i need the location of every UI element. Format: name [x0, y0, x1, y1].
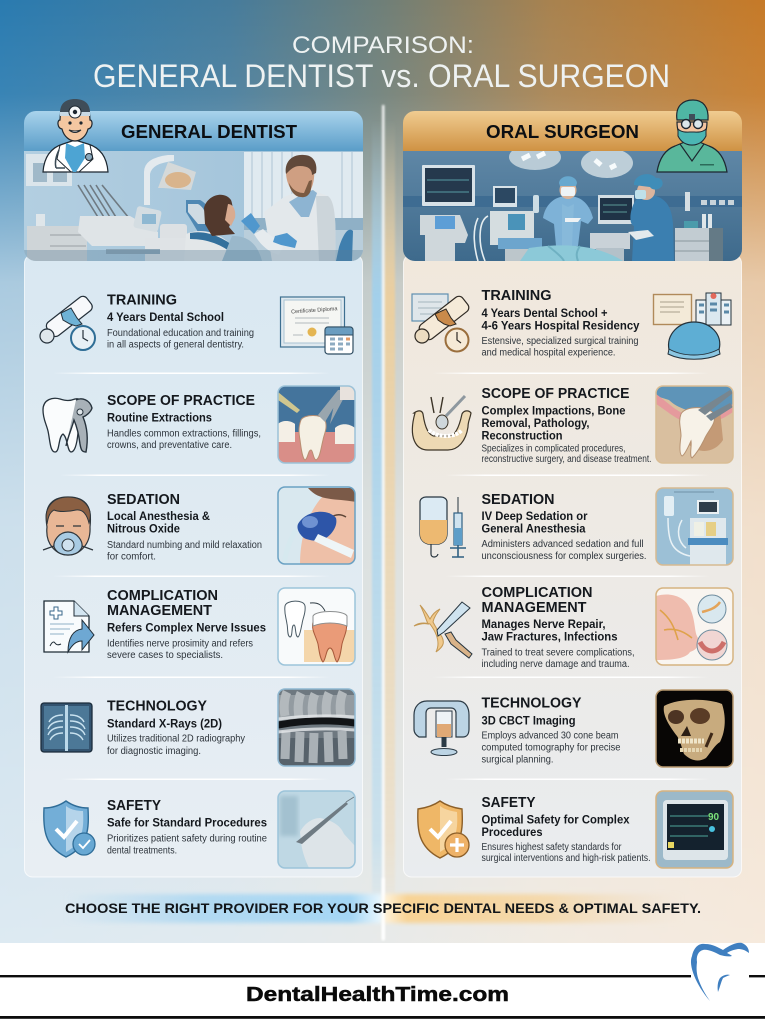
icon: diploma and clock	[40, 294, 95, 350]
picture: tooth extraction	[278, 386, 355, 463]
divider	[53, 372, 330, 374]
text	[107, 393, 261, 451]
text: Trained to treat severe complications,	[482, 647, 634, 658]
panel body	[24, 255, 362, 877]
text: unconsciousness for complex surgeries.	[482, 551, 646, 562]
text: surgical planning.	[482, 755, 554, 766]
rows: oral surgeon	[412, 288, 733, 868]
picture: tooth root diagram	[278, 588, 356, 665]
text: SCOPE OF PRACTICE	[107, 393, 255, 409]
text: in all aspects of general dentistry.	[107, 340, 244, 351]
text: TRAINING	[107, 292, 177, 308]
divider	[53, 676, 330, 678]
icon: gold shield plus	[418, 801, 469, 858]
rows: general dentist	[40, 292, 356, 868]
text: Removal, Pathology,	[482, 416, 590, 430]
callout: call to action: CHOOSE THE RIGHT PROVIDER FOR YOUR SPECIFIC DENTAL NEEDS & OPTIMAL SAFETY.	[65, 900, 701, 916]
text	[107, 292, 254, 351]
text: Manages Nerve Repair,	[482, 617, 606, 631]
text: for diagnostic imaging.	[107, 746, 201, 757]
text: TECHNOLOGY	[107, 699, 207, 715]
divider	[432, 372, 709, 374]
text: COMPLICATION	[482, 585, 592, 601]
title	[93, 32, 670, 94]
text	[482, 585, 634, 670]
text: SAFETY	[482, 795, 536, 811]
text: Refers Complex Nerve Issues	[107, 621, 266, 635]
text: surgical interventions and high-risk patients.	[482, 853, 650, 864]
picture: anesthesia machine	[656, 488, 733, 565]
divider	[53, 576, 330, 577]
text: computed tomography for precise	[482, 743, 621, 754]
text: Complex Impactions, Bone	[482, 403, 626, 417]
icon: nerve and scalpel	[414, 602, 472, 658]
text: dental treatments.	[107, 845, 177, 856]
text: SEDATION	[482, 492, 554, 508]
text: Specializes in complicated procedures,	[482, 444, 626, 455]
picture: certificate and calendar: Certificate Diploma	[291, 306, 339, 315]
text: crowns, and preventative care.	[107, 440, 232, 451]
header bar	[24, 111, 363, 151]
row: safety	[44, 791, 355, 868]
footer	[0, 943, 765, 1024]
picture: nitrous mask	[278, 487, 356, 564]
icon: tooth and forceps	[43, 398, 92, 452]
text: Procedures	[482, 825, 543, 839]
text: Employs advanced 30 cone beam	[482, 731, 618, 742]
text: 4-6 Years Hospital Residency	[482, 318, 640, 332]
text: Prioritizes patient safety during routine	[107, 834, 267, 845]
row: training	[412, 288, 731, 359]
text	[482, 795, 650, 864]
picture: certificate and calendar	[280, 297, 353, 354]
text: severe cases to specialists.	[107, 650, 223, 661]
title: COMPARISON:	[292, 32, 474, 59]
icon: chest x-ray	[41, 703, 92, 752]
text: Reconstruction	[482, 429, 562, 443]
text: MANAGEMENT	[107, 603, 212, 619]
text: Ensures highest safety standards for	[482, 842, 622, 853]
text: Standard numbing and mild relaxation	[107, 540, 262, 551]
text: including nerve damage and trauma.	[482, 659, 630, 670]
panel: general dentist	[24, 111, 363, 877]
text: Jaw Fractures, Infections	[482, 630, 618, 644]
picture: dental x-ray	[278, 689, 355, 766]
icon: patient with mask	[43, 497, 93, 555]
icon: CBCT scanner	[414, 701, 469, 756]
text: Administers advanced sedation and full	[482, 539, 644, 550]
icon: referral document	[44, 601, 94, 652]
heading: GENERAL DENTIST	[121, 122, 297, 142]
text: Routine Extractions	[107, 411, 212, 425]
icon: shield check	[44, 801, 95, 857]
picture: patient monitor	[656, 791, 733, 868]
text: MANAGEMENT	[482, 600, 587, 616]
operating room photo	[403, 144, 742, 261]
text: 3D CBCT Imaging	[482, 714, 576, 728]
text	[482, 696, 621, 766]
row: training	[40, 292, 353, 354]
picture: certificate, hospital, surgical cap	[654, 293, 731, 359]
text: Standard X-Rays (2D)	[107, 717, 222, 731]
text: General Anesthesia	[482, 522, 586, 536]
icon: tooth logo	[691, 943, 749, 1001]
text: Estensive, specialized surgical training	[482, 336, 638, 347]
text: Handles common extractions, fillings,	[107, 429, 261, 440]
text: Safe for Standard Procedures	[107, 816, 267, 830]
row: safety	[418, 791, 733, 868]
text: Nitrous Oxide	[107, 522, 180, 536]
text	[107, 699, 245, 757]
text: Utilizes traditional 2D radiography	[107, 734, 245, 745]
divider	[445, 576, 710, 577]
website name: DentalHealthTime.com	[246, 984, 509, 1006]
text: for comfort.	[107, 551, 156, 562]
row: technology	[41, 689, 355, 766]
text	[107, 492, 262, 562]
picture: facial anatomy	[656, 588, 733, 665]
avatar: surgeon	[657, 100, 727, 172]
text: SEDATION	[107, 492, 180, 508]
icon: IV bag and syringe	[420, 497, 466, 557]
text	[107, 588, 266, 661]
picture: patient monitor: 90	[708, 812, 720, 823]
divider	[445, 474, 710, 476]
picture: surgical extraction	[656, 386, 733, 463]
title: GENERAL DENTIST vs. ORAL SURGEON	[93, 58, 670, 94]
text: Local Anesthesia &	[107, 509, 210, 523]
text: 4 Years Dental School +	[482, 306, 608, 320]
text: IV Deep Sedation or	[482, 509, 588, 523]
text: Optimal Safety for Complex	[482, 813, 630, 827]
clinic photo	[24, 151, 363, 261]
heading: ORAL SURGEON	[486, 122, 639, 142]
text: and medical hospital experience.	[482, 348, 616, 359]
row: complication	[44, 588, 356, 665]
panel body	[404, 255, 742, 877]
text	[482, 492, 646, 562]
text	[482, 386, 652, 465]
text: reconstructive surgery, and disease treatment.	[482, 454, 652, 465]
text: SCOPE OF PRACTICE	[482, 386, 630, 402]
icon: diploma scroll and clock	[412, 294, 471, 352]
text: Foundational education and training	[107, 328, 254, 339]
row: technology	[414, 690, 733, 767]
text	[482, 288, 640, 359]
header bar	[403, 111, 742, 151]
divider	[432, 676, 709, 678]
picture: gloved hand with probe	[278, 791, 355, 868]
icon: jaw with instruments	[412, 396, 471, 450]
text: Identifies nerve prosimity and refers	[107, 639, 253, 650]
row: complication	[414, 585, 733, 670]
text: 4 Years Dental School	[107, 310, 224, 324]
divider	[60, 778, 330, 780]
panel: oral surgeon	[403, 111, 742, 877]
text: TECHNOLOGY	[482, 696, 582, 712]
text: COMPLICATION	[107, 588, 218, 604]
text: SAFETY	[107, 798, 161, 814]
divider	[445, 778, 710, 780]
text: TRAINING	[482, 288, 552, 304]
callout: call to action	[65, 878, 701, 940]
row: sedation	[420, 488, 733, 565]
picture: 3D skull scan	[656, 690, 733, 767]
row: sedation	[43, 487, 356, 564]
row: scope	[43, 386, 355, 463]
text	[107, 798, 267, 856]
avatar: dentist	[43, 99, 108, 172]
divider	[60, 474, 330, 476]
row: scope	[412, 386, 733, 465]
